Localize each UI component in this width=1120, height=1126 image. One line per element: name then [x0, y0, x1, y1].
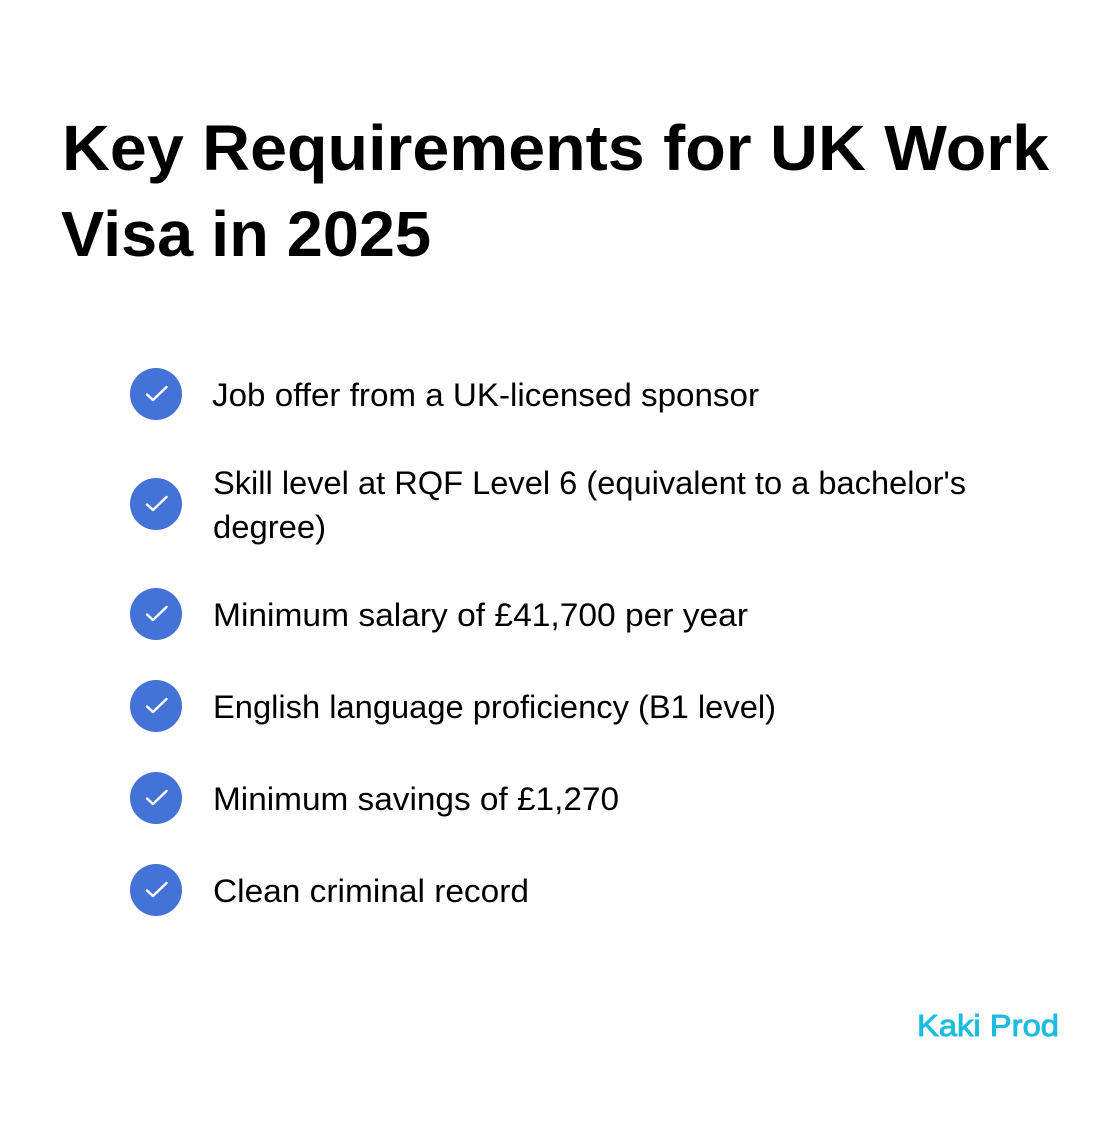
- item: clean record: [130, 864, 529, 916]
- item: english proficiency: [130, 680, 776, 732]
- title: Visa in 2025: [61, 198, 431, 270]
- item: minimum savings: Minimum savings of £1,270: [213, 781, 619, 817]
- title: Key Requirements for UK Work: [62, 112, 1049, 184]
- item: minimum salary: [130, 588, 748, 640]
- logo: Kaki Prod: Kaki Prod: [917, 1008, 1059, 1043]
- item: clean record: Clean criminal record: [213, 873, 529, 909]
- item: skill level: degree): [213, 509, 326, 545]
- item: english proficiency: English language proficiency (B1 level): [213, 689, 776, 725]
- item: minimum savings: [130, 772, 619, 824]
- item: job offer: [130, 368, 759, 420]
- item: job offer: Job offer from a UK-licensed sponsor: [212, 377, 759, 413]
- item: skill level: [130, 465, 966, 545]
- title: [61, 112, 1049, 270]
- requirements list: [130, 368, 966, 916]
- item: minimum salary: Minimum salary of £41,700 per year: [213, 597, 748, 633]
- item: skill level: Skill level at RQF Level 6 (equivalent to a bachelor's: [213, 465, 966, 501]
